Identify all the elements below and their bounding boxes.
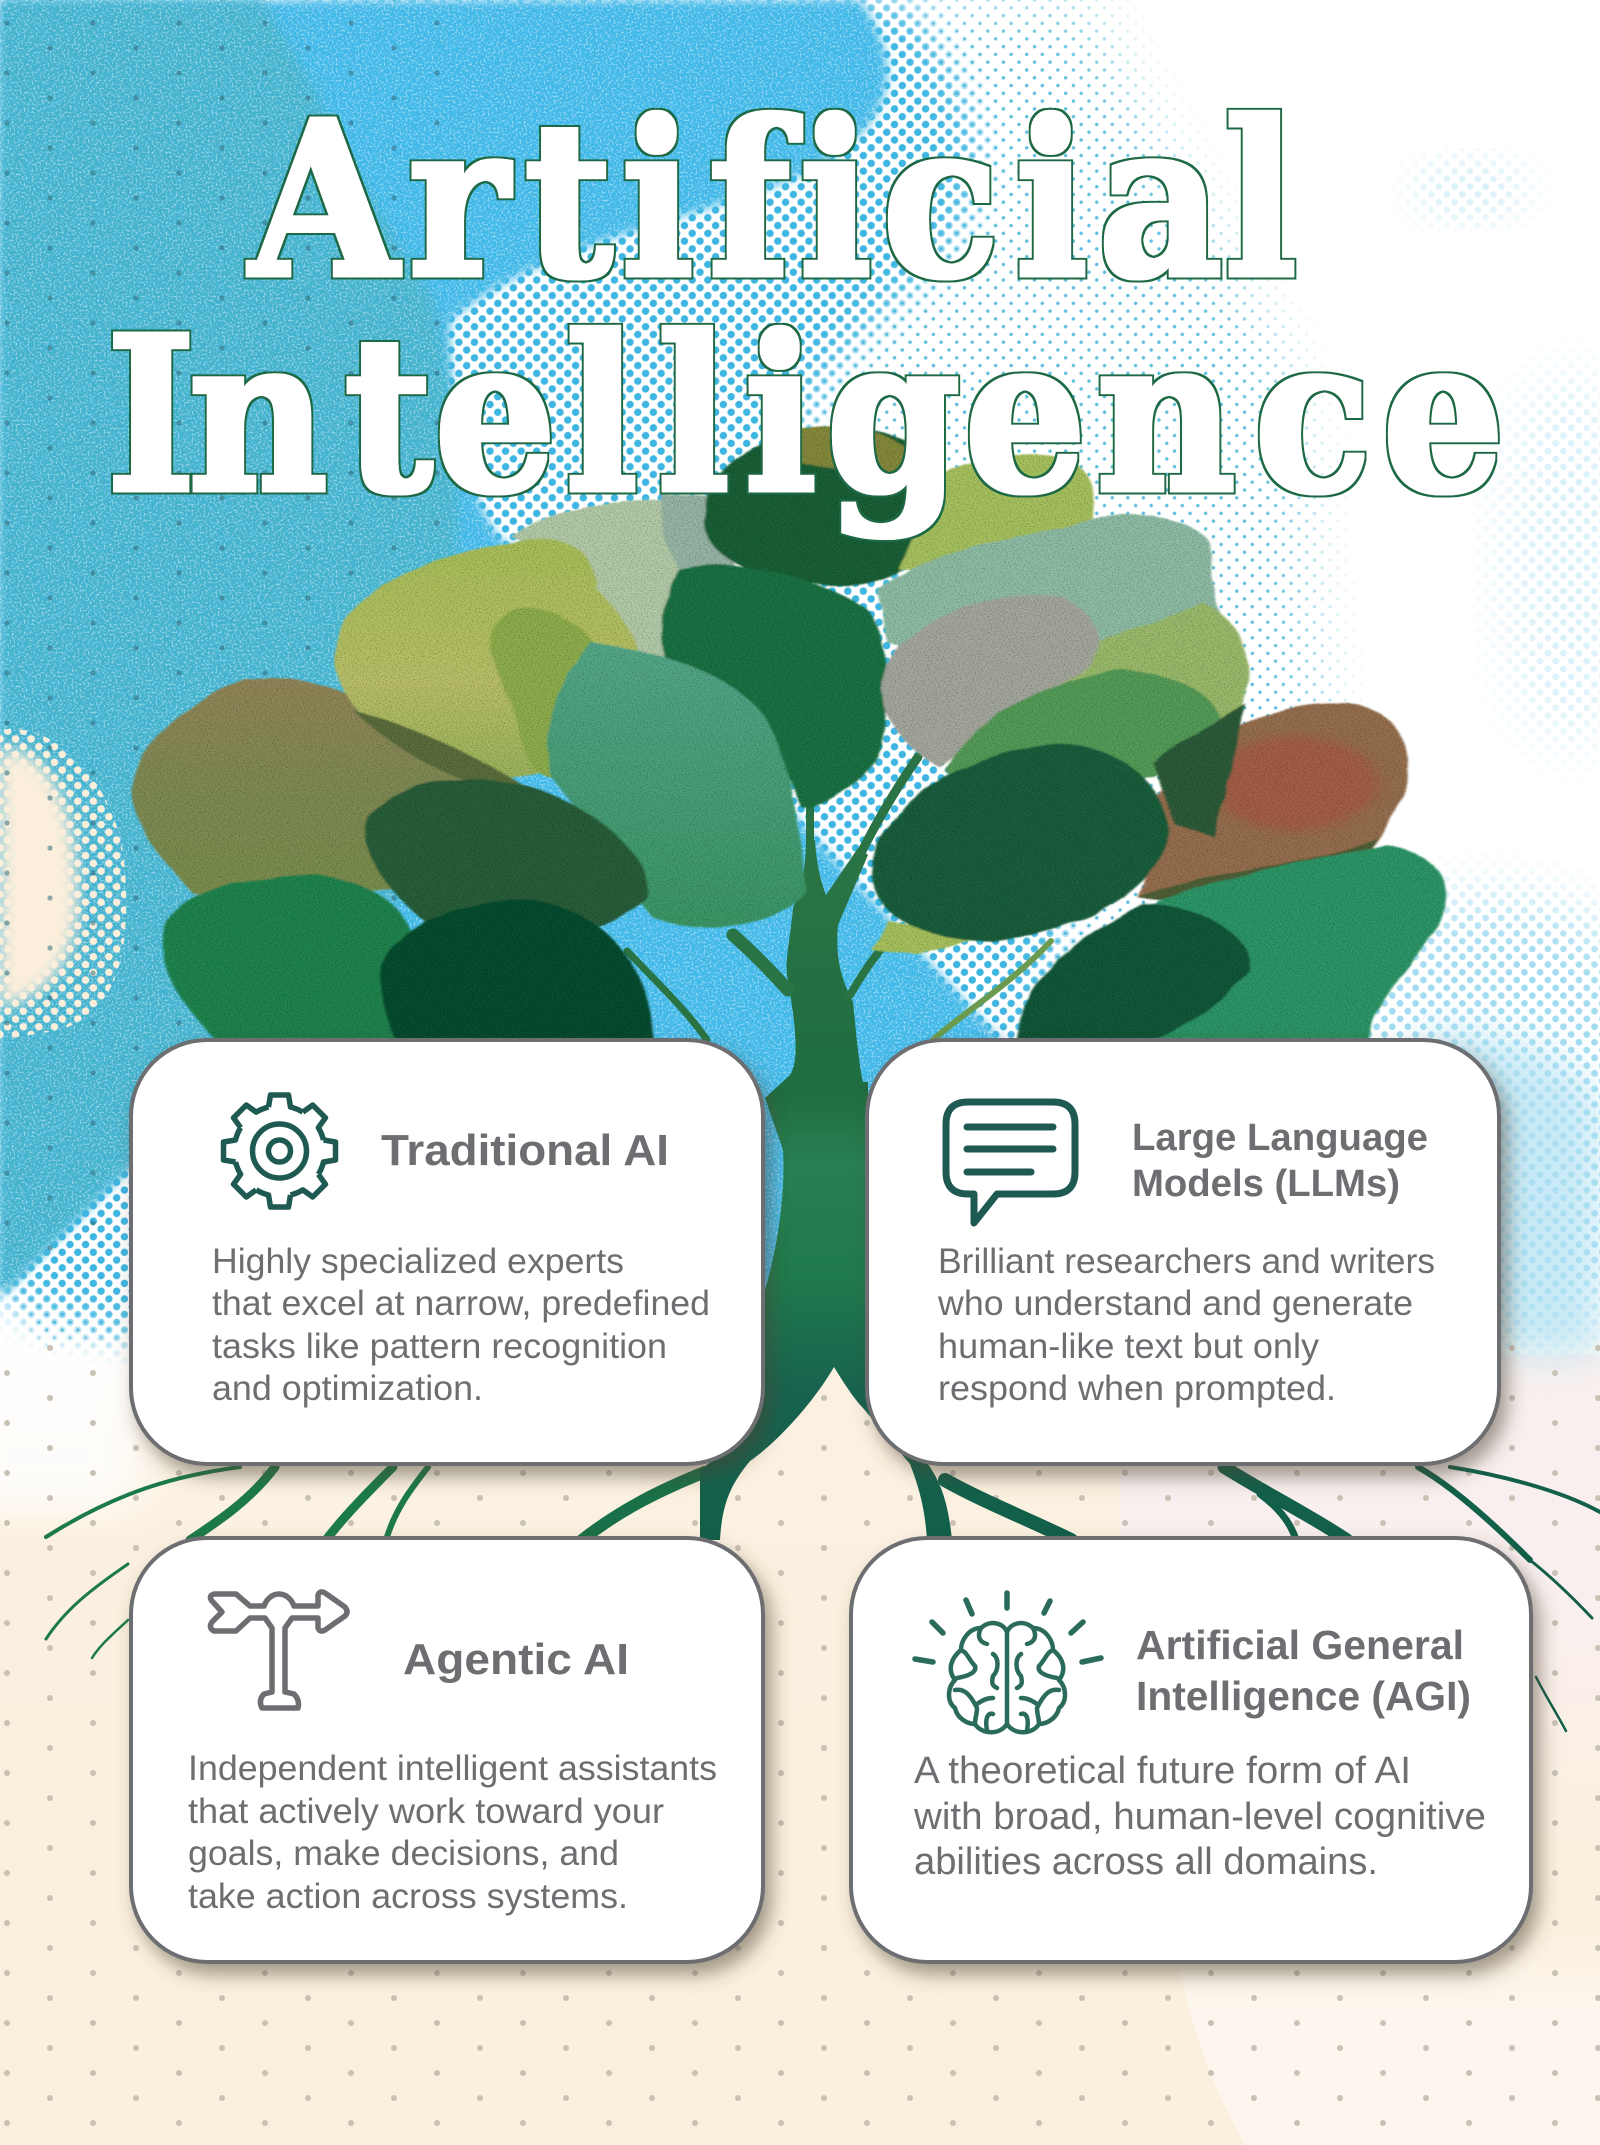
leaf: inner yellow: [490, 608, 610, 778]
blue halftone sparse edge: [0, 0, 1363, 1352]
description: take action across systems.: [188, 1877, 628, 1916]
leaf: dark olive: [365, 779, 648, 935]
description: goals, make decisions, and: [188, 1834, 619, 1873]
description: [937, 1242, 1435, 1408]
panel: Agentic AI: [131, 1538, 763, 1962]
leaf: light green top right: [898, 454, 1095, 569]
teal wash left: [0, 0, 459, 1295]
icon: weather vane: [210, 1592, 347, 1708]
tree: [46, 426, 1600, 1731]
panel: Traditional AI: [131, 1040, 763, 1464]
leaf: small light green: [872, 921, 980, 954]
leaf: mid green: [944, 670, 1220, 790]
icon: brain with rays: [915, 1593, 1101, 1732]
speckle on blue: [0, 0, 1000, 1300]
heading: [1132, 1117, 1428, 1205]
panel: Artificial General Intelligence: [851, 1538, 1531, 1962]
leaf: rust: [1138, 703, 1408, 902]
blue wash core: [0, 0, 1000, 1300]
heading: Intelligence (AGI): [1136, 1673, 1471, 1719]
leaf: sage right: [878, 515, 1235, 676]
leaf: dark lower right: [1015, 904, 1250, 1045]
cream dot grid: [0, 1340, 1600, 2145]
leaf: olive top tint: [796, 426, 929, 486]
leaf: lower left green: [163, 874, 413, 1045]
panel: Large Language Models: [867, 1040, 1499, 1464]
dark dot grid on blue: [0, 0, 470, 1270]
card box: [131, 1538, 763, 1962]
description: respond when prompted.: [938, 1369, 1336, 1408]
branches: [627, 757, 1051, 1040]
leaf: centre dark green: [662, 565, 888, 807]
description: [212, 1242, 710, 1408]
heading: Agentic AI: [403, 1635, 629, 1684]
leaf: light green right: [969, 603, 1249, 757]
description: human-like text but only: [938, 1327, 1320, 1366]
leaf: teal green: [548, 643, 806, 927]
pink ground panel: [1120, 1355, 1600, 1850]
description: [913, 1750, 1486, 1883]
title line 1: Artificial: [247, 75, 1297, 327]
cream blob: [0, 750, 78, 1008]
description: Highly specialized experts: [212, 1242, 624, 1281]
title line 2: Intelligence: [106, 290, 1505, 542]
description: Brilliant researchers and writers: [938, 1242, 1435, 1281]
leaf: pale sage top left: [510, 500, 735, 690]
leaf: rust core: [1214, 737, 1378, 831]
card box: [867, 1040, 1499, 1464]
icon: gear: [223, 1095, 336, 1207]
description: abilities across all domains.: [914, 1841, 1378, 1883]
description: with broad, human-level cognitive: [913, 1796, 1486, 1838]
light blue wash right: [1420, 1030, 1600, 1355]
leaf: dark top: [704, 428, 946, 586]
description: [188, 1749, 717, 1916]
heading: Traditional AI: [381, 1126, 669, 1175]
leaf: dark large right: [872, 743, 1168, 941]
light blue halftone edge: [1368, 148, 1600, 1355]
heading: [1136, 1622, 1471, 1719]
description: tasks like pattern recognition: [212, 1327, 667, 1366]
leaf: darkest: [381, 900, 653, 1045]
heading: Large Language: [1132, 1117, 1428, 1159]
cream blob halftone outer: [0, 729, 126, 1040]
leaf: dark wedge: [1153, 703, 1245, 837]
icon: speech bubble: [946, 1102, 1075, 1223]
description: that excel at narrow, predefined: [212, 1284, 710, 1323]
card box: [131, 1040, 763, 1464]
description: A theoretical future form of AI: [914, 1750, 1411, 1792]
description: who understand and generate: [937, 1284, 1413, 1323]
canopy: [133, 426, 1448, 1045]
roots: [46, 1467, 1600, 1731]
description: Independent intelligent assistants: [188, 1749, 717, 1788]
leaf: olive left: [133, 678, 499, 896]
cream ground: [0, 1300, 1600, 2145]
heading: Artificial General: [1136, 1622, 1464, 1668]
leaf: olive shadow: [352, 710, 526, 788]
leaf: grey pink: [882, 595, 1099, 767]
cream ground under the trunk fork: [640, 1365, 1120, 1545]
leaf: yellow green: [335, 539, 641, 778]
blue halftone edge: [0, 0, 1095, 1364]
heading: Models (LLMs): [1132, 1163, 1400, 1205]
description: and optimization.: [212, 1369, 483, 1408]
leaf: grey green: [661, 496, 735, 576]
leaf: lower right green: [1122, 845, 1448, 1045]
card box: [851, 1538, 1531, 1962]
pale wedge lower right: [1173, 1930, 1600, 2145]
title: [106, 75, 1505, 542]
white fade lower left: [0, 1290, 135, 1510]
leaf: rust bottom: [1138, 837, 1378, 903]
description: that actively work toward your: [188, 1792, 664, 1831]
trunk: [700, 840, 952, 1540]
